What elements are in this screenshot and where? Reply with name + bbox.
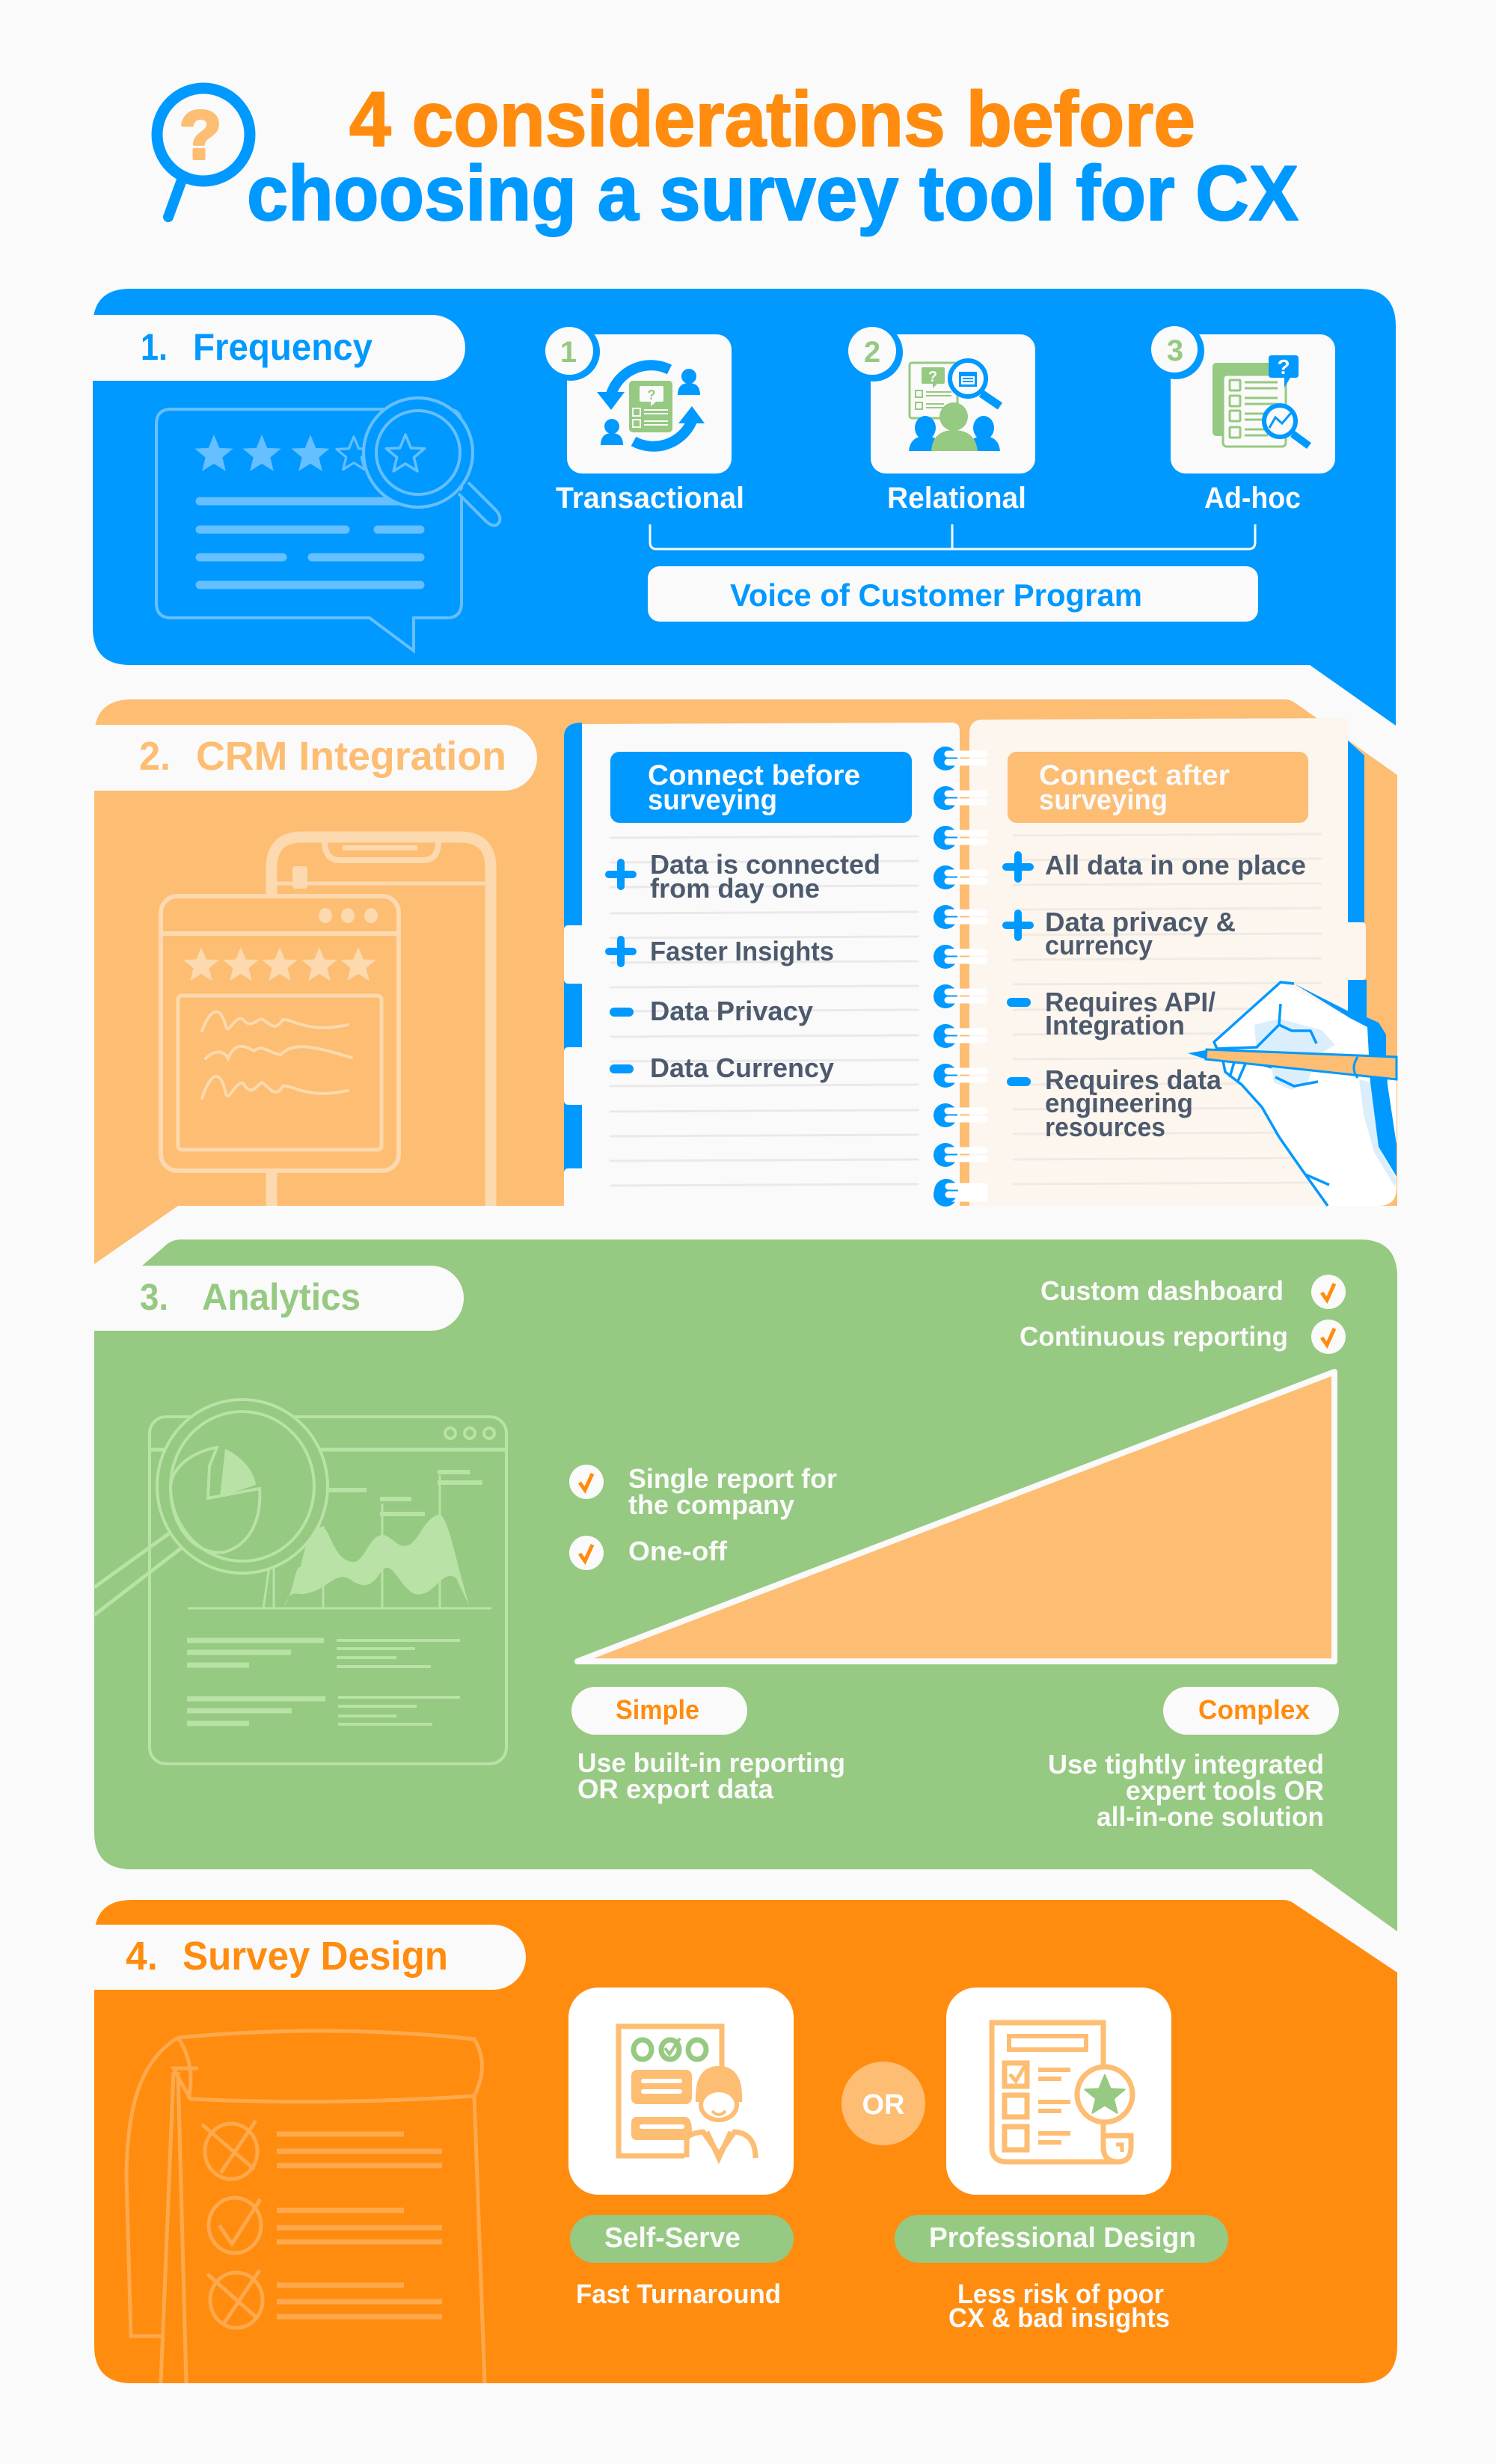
badge 3: 3	[1167, 334, 1183, 367]
text: fast turnaround: Fast Turnaround	[576, 2278, 781, 2309]
pill: professional design	[895, 2215, 1228, 2263]
column heading: connect after	[1008, 752, 1308, 823]
panel background	[93, 289, 1396, 726]
pill: simple	[571, 1687, 747, 1735]
illustration: hand holding pen	[1188, 980, 1397, 1206]
text: complex recommendation: expert tools OR	[1126, 1775, 1324, 1806]
label: ad-hoc: Ad-hoc	[1204, 482, 1301, 515]
list: simple features: the company	[628, 1489, 794, 1520]
list: connect before: Data Privacy	[650, 996, 813, 1026]
list: connect before: Faster Insights	[650, 936, 834, 966]
label: transactional: Transactional	[556, 482, 744, 515]
text: complex recommendation: Use tightly integrated	[1048, 1749, 1324, 1780]
list: simple features: Single report for	[628, 1463, 837, 1494]
heading: analytics: 3.	[140, 1276, 168, 1318]
icon: ad-hoc checklist	[1213, 355, 1309, 447]
pill: professional design: Professional Design	[929, 2222, 1196, 2254]
pill: simple: Simple	[616, 1694, 699, 1725]
pill: complex: Complex	[1198, 1694, 1310, 1725]
text: less risk: CX & bad insights	[948, 2302, 1170, 2333]
card: transactional	[542, 322, 744, 515]
list: connect after: Data privacy &	[1045, 907, 1236, 937]
column heading: connect before: surveying	[648, 785, 777, 816]
heading: survey design	[94, 1925, 526, 1990]
heading: frequency: Frequency	[193, 326, 373, 368]
text: simple recommendation: OR export data	[577, 1774, 774, 1804]
panel background	[94, 1239, 1397, 1931]
panel: analytics	[94, 1239, 1397, 1931]
list: connect after: Requires API/	[1045, 987, 1216, 1017]
text: simple recommendation: Use built-in reporting	[577, 1747, 845, 1778]
icon: magnifying glass with question mark: ?	[180, 97, 221, 174]
column heading: connect before	[610, 752, 912, 823]
list: connect before: Data is connected	[650, 849, 880, 880]
icon: survey cycle: ?	[648, 387, 655, 402]
illustration: review speech bubble with magnifier	[156, 398, 500, 651]
list: connect after: Integration	[1045, 1010, 1185, 1041]
text: complex recommendation: all-in-one solution	[1097, 1801, 1324, 1832]
title line 2: choosing a survey tool for CX	[247, 150, 1299, 237]
illustration: phone and survey window	[161, 837, 491, 1206]
illustration: survey scroll	[126, 2031, 485, 2383]
list: connect after: Requires data	[1045, 1064, 1222, 1095]
badge 3	[1147, 322, 1204, 379]
heading: survey design: Survey Design	[183, 1934, 448, 1979]
card: professional design icon	[946, 1988, 1171, 2195]
notebook	[564, 718, 1397, 1207]
list: connect before: Data Currency	[650, 1052, 834, 1083]
panel background	[94, 699, 1397, 1264]
left page	[564, 723, 960, 1206]
text: less risk	[948, 2278, 1170, 2333]
heading: analytics: Analytics	[202, 1276, 361, 1318]
callout: voice of customer program: Voice of Customer Program	[730, 577, 1142, 613]
badge 1: 1	[560, 336, 577, 369]
card: self-serve icon	[568, 1988, 794, 2195]
badge 2: 2	[864, 336, 880, 369]
list: connect before	[609, 849, 880, 1083]
pill: self-serve: Self-Serve	[604, 2222, 741, 2254]
list: complex features: Continuous reporting	[1020, 1321, 1288, 1352]
text: less risk: Less risk of poor	[957, 2278, 1164, 2309]
column heading: connect after: surveying	[1039, 785, 1168, 816]
badge 1	[542, 322, 600, 381]
icon: relational group: ?	[928, 369, 937, 385]
heading: crm integration: 2.	[139, 734, 171, 779]
card: ad-hoc	[1147, 322, 1335, 515]
heading: analytics	[94, 1266, 464, 1331]
list: connect after	[1006, 850, 1306, 1142]
icon: relational group	[909, 361, 1000, 451]
list: connect after: resources	[1045, 1112, 1165, 1142]
panel: frequency	[93, 289, 1396, 726]
heading: crm integration	[94, 725, 537, 791]
list: complex features: Custom dashboard	[1040, 1275, 1284, 1306]
heading: survey design: 4.	[126, 1934, 158, 1979]
list: complex features	[1020, 1275, 1346, 1354]
heading: frequency: 1.	[141, 326, 168, 368]
icon: survey cycle	[597, 365, 705, 447]
heading: crm integration: CRM Integration	[196, 734, 506, 779]
title	[157, 76, 1299, 237]
list: connect before: from day one	[650, 873, 820, 904]
triangle chart: simple to complex	[577, 1372, 1334, 1661]
card: relational	[844, 323, 1035, 515]
label: relational: Relational	[887, 482, 1026, 515]
panel: survey design	[94, 1900, 1397, 2383]
column heading: connect after: Connect after	[1039, 760, 1230, 791]
icon: ad-hoc checklist: ?	[1277, 355, 1290, 379]
icon: magnifying glass with question mark	[157, 88, 250, 217]
badge 2	[844, 323, 903, 381]
text: complex recommendation	[1048, 1749, 1324, 1832]
pill: complex	[1163, 1687, 1339, 1735]
pill: self-serve	[570, 2215, 794, 2263]
panel: crm integration	[94, 699, 1397, 1264]
callout: voice of customer program	[648, 566, 1258, 622]
badge: or	[842, 2062, 925, 2145]
list: connect after: All data in one place	[1045, 850, 1306, 880]
right page	[960, 718, 1366, 1206]
column heading: connect before: Connect before	[648, 760, 860, 791]
list: simple features	[569, 1463, 837, 1570]
heading: frequency	[93, 315, 465, 381]
spiral binding	[934, 747, 984, 1207]
panel background	[94, 1900, 1397, 2383]
list: simple features: One-off	[628, 1536, 728, 1566]
badge: or: OR	[862, 2089, 905, 2121]
bracket connector	[650, 524, 1255, 549]
list: connect after: currency	[1045, 930, 1153, 960]
text: simple recommendation	[577, 1747, 845, 1804]
illustration: analytics dashboard with magnifier	[94, 1400, 506, 1764]
list: connect after: engineering	[1045, 1088, 1193, 1118]
title line 1: 4 considerations before	[349, 76, 1195, 163]
